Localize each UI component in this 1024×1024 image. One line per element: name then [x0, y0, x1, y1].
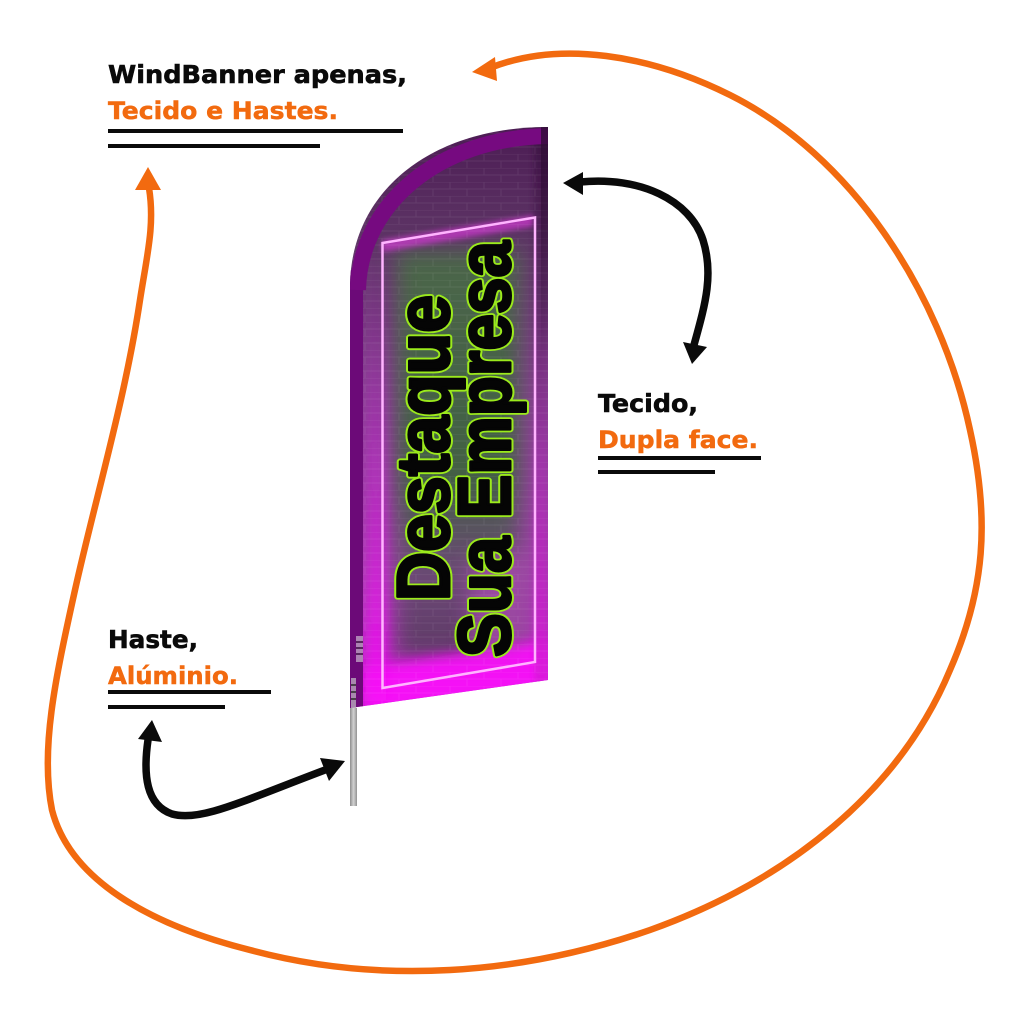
banner flag [350, 127, 548, 708]
black double arrow: pole [138, 720, 345, 816]
label: Tecido, Dupla face: Tecido, [598, 389, 698, 418]
label: Tecido, Dupla face: Dupla face. [598, 426, 758, 454]
label: WindBanner apenas, Tecido e Hastes: WindBanner apenas, [108, 60, 407, 89]
fabric background [350, 127, 548, 708]
label: WindBanner apenas, Tecido e Hastes [108, 60, 407, 148]
headline: Destaque: Destaque [382, 295, 465, 601]
label: WindBanner apenas, Tecido e Hastes: Tecido e Hastes. [108, 97, 338, 125]
headline: Destaque: Destaque [382, 295, 465, 601]
label: Haste, Alumínio: Alúminio. [108, 662, 238, 690]
aluminium pole [350, 708, 357, 806]
label: Haste, Alumínio: Haste, [108, 625, 198, 654]
headline: Sua Empresa: Sua Empresa [443, 240, 526, 657]
neon frame [382, 218, 535, 688]
label: Haste, Alumínio [108, 625, 271, 709]
label: Tecido, Dupla face [598, 389, 761, 474]
headline: Sua Empresa: Sua Empresa [443, 240, 526, 657]
black double arrow: fabric [563, 172, 708, 364]
small print on fabric edge [351, 636, 363, 708]
